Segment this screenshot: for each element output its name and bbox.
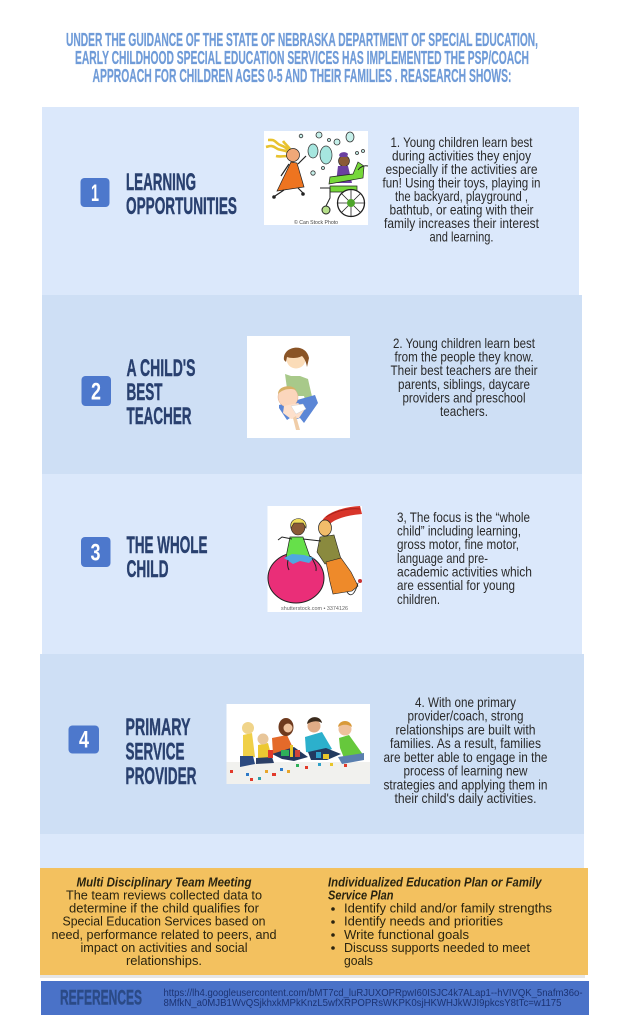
heading: references: REFERENCES (60, 986, 142, 1010)
text: primary provider description: relationships are built with (396, 722, 536, 738)
heading: a child's best teacher (126, 355, 196, 430)
heading: primary service provider: SERVICE (126, 738, 184, 766)
heading: the whole child: THE WHOLE (126, 532, 208, 559)
badge 4 (68, 726, 99, 754)
text: best teacher description: 2. Young children learn best (393, 335, 535, 351)
text: reference url: 8MfkN_a0MJB1WvQSjkhxkMPkKnzL5wfXRPOPRsWKPK0sjHKWHJkWJI9pkcsY8tTc=w1175 (164, 997, 562, 1009)
badge 4: 4 (79, 726, 89, 754)
text: whole child description: 3, The focus is the “whole (397, 509, 530, 525)
text: learning opportunities description: and learning. (430, 228, 494, 244)
text: individualized education plan list: Service Plan (328, 888, 394, 902)
text: multi disciplinary team meeting: determine if the child qualifies for (69, 900, 260, 916)
text: primary provider description: their child's daily activities. (394, 790, 536, 806)
text: multi disciplinary team meeting: need, performance related to peers, and (52, 927, 276, 942)
text: primary provider description: families. As a result, families (390, 735, 541, 751)
image: children with bubbles and wheelchair (264, 131, 368, 226)
text: multi disciplinary team meeting (52, 874, 276, 968)
text: whole child description: language and pre- (397, 550, 488, 566)
panel: the whole child (42, 474, 582, 654)
badge 3 (81, 537, 110, 567)
badge 1: 1 (91, 180, 99, 207)
text: whole child description: children. (397, 591, 440, 607)
text: whole child description: are essential for young (397, 577, 515, 593)
text: individualized education plan list: Identify needs and priorities (344, 914, 503, 928)
text: multi disciplinary team meeting: The team reviews collected data to (66, 888, 262, 902)
panel: primary service provider (40, 654, 584, 834)
text: learning opportunities description: fun! Using their toys, playing in (382, 174, 540, 190)
badge 1 (80, 178, 110, 207)
image: family playing with blocks (226, 704, 370, 784)
text: primary provider description: strategies and applying them in (384, 776, 548, 792)
panel: references (41, 981, 589, 1015)
text: best teacher description: from the people they know. (394, 348, 534, 364)
heading: learning opportunities: LEARNING (126, 169, 196, 196)
text: individualized education plan list: goals (344, 953, 373, 968)
image: children on exercise ball (268, 506, 362, 612)
text: learning opportunities description: family increases their interest (384, 215, 539, 231)
badge 2 (82, 376, 111, 406)
heading: primary service provider (126, 714, 197, 790)
heading: primary service provider: PRIMARY (126, 714, 190, 741)
text: reference url (164, 987, 583, 1009)
badge 3: 3 (90, 540, 100, 566)
text: best teacher description: providers and preschool (402, 390, 526, 406)
heading: a child's best teacher: TEACHER (126, 403, 192, 430)
text: learning opportunities description: during activities they enjoy (392, 148, 531, 164)
image: older child holding baby (247, 336, 350, 438)
text: multi disciplinary team meeting: relationships. (126, 953, 202, 968)
badge 2: 2 (91, 378, 101, 406)
heading: primary service provider: PROVIDER (126, 763, 197, 790)
text: best teacher description: parents, siblings, daycare (398, 376, 530, 392)
text: primary provider description: provider/coach, strong (408, 708, 524, 724)
text: individualized education plan list: Identify child and/or family strengths (344, 900, 552, 916)
text: whole child description: academic activities which (397, 564, 532, 580)
text: learning opportunities description: bathtub, or eating with their (390, 202, 534, 218)
heading: the whole child: CHILD (126, 556, 168, 583)
text: best teacher description: teachers. (440, 403, 488, 419)
text: individualized education plan list: Write functional goals (344, 927, 469, 942)
text: learning opportunities description: especially if the activities are (386, 161, 538, 177)
text: learning opportunities description (382, 134, 540, 244)
text: whole child description: child” including learning, (397, 522, 521, 538)
heading: the whole child (126, 532, 208, 583)
panel: a child's best teacher (42, 295, 582, 474)
text: learning opportunities description: 1. Young children learn best (390, 134, 533, 150)
text: individualized education plan list: Individualized Education Plan or Family (328, 874, 542, 890)
text: primary provider description: are better able to engage in the (384, 749, 548, 765)
image: children on exercise ball: shutterstock.com • 3374126 (281, 606, 348, 612)
heading: learning opportunities: OPPORTUNITIES (126, 193, 237, 220)
text: best teacher description: Their best teachers are their (390, 362, 538, 378)
heading: learning opportunities (126, 169, 237, 220)
text: whole child description (397, 509, 532, 607)
title (66, 29, 538, 86)
text: primary provider description (384, 694, 548, 806)
text: learning opportunities description: the backyard, playground , (395, 188, 528, 204)
text: reference url: https://lh4.googleusercontent.com/bMT7cd_luRJUXOPRpwI60ISJC4k7ALap1--hVIVQK_5nafm36o- (164, 987, 583, 999)
text: best teacher description (390, 335, 538, 419)
text: primary provider description: 4. With one primary (415, 694, 516, 710)
text: individualized education plan list (328, 874, 552, 968)
image: children with bubbles and wheelchair: © Can Stock Photo (294, 219, 338, 226)
panel: learning opportunities (42, 107, 579, 295)
text: whole child description: gross motor, fine motor, (397, 536, 519, 552)
text: multi disciplinary team meeting: Special Education Services based on (62, 914, 266, 928)
heading: a child's best teacher: A CHILD'S (126, 355, 196, 382)
panel: team meeting and education plan (40, 868, 588, 975)
text: multi disciplinary team meeting: impact on activities and social (80, 940, 248, 955)
heading: a child's best teacher: BEST (126, 379, 163, 406)
text: multi disciplinary team meeting: Multi Disciplinary Team Meeting (76, 874, 252, 890)
text: individualized education plan list: Discuss supports needed to meet (344, 940, 530, 955)
text: primary provider description: process of learning new (404, 762, 528, 778)
